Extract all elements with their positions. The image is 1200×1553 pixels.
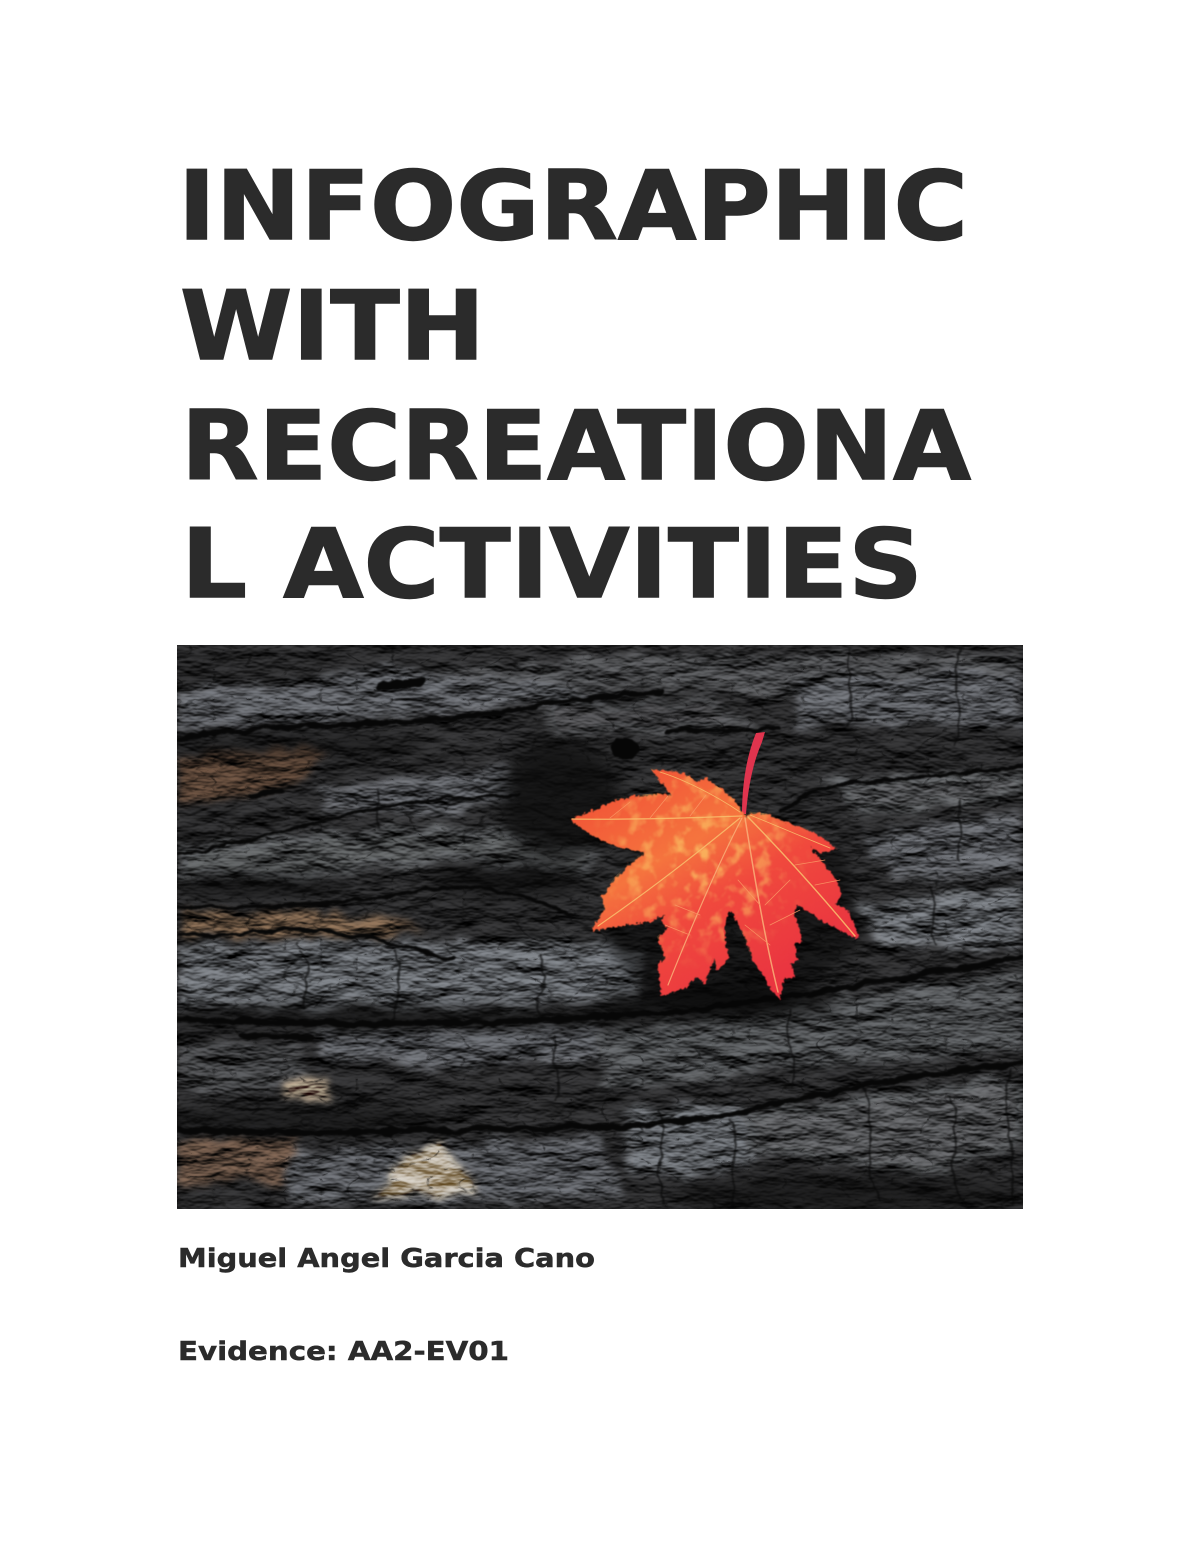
title: L ACTIVITIES [181, 510, 923, 620]
leaf veins [572, 772, 855, 992]
title: WITH [180, 272, 485, 382]
bark brown and tan patches [177, 745, 480, 1196]
photo: maple leaf on charred bark [140, 645, 1030, 1215]
evidence code: Evidence: AA2-EV01 [178, 1337, 509, 1367]
bark light plates [177, 655, 1023, 1205]
bark surface texture [177, 645, 1023, 1209]
title: INFOGRAPHIC [178, 152, 968, 262]
charred bark background [140, 645, 1030, 1215]
title [178, 152, 971, 620]
author name: Miguel Angel Garcia Cano [178, 1244, 595, 1274]
icon: red maple leaf [570, 732, 860, 1000]
knot hole [612, 737, 638, 759]
title: RECREATIONA [181, 392, 971, 502]
leaf yellow mottling [603, 768, 808, 963]
leaf shadow [597, 845, 864, 1004]
leaf stem [742, 732, 765, 814]
leaf blade [570, 768, 860, 1000]
bark shadows [140, 691, 1030, 1215]
bark cracks [177, 650, 1023, 1205]
